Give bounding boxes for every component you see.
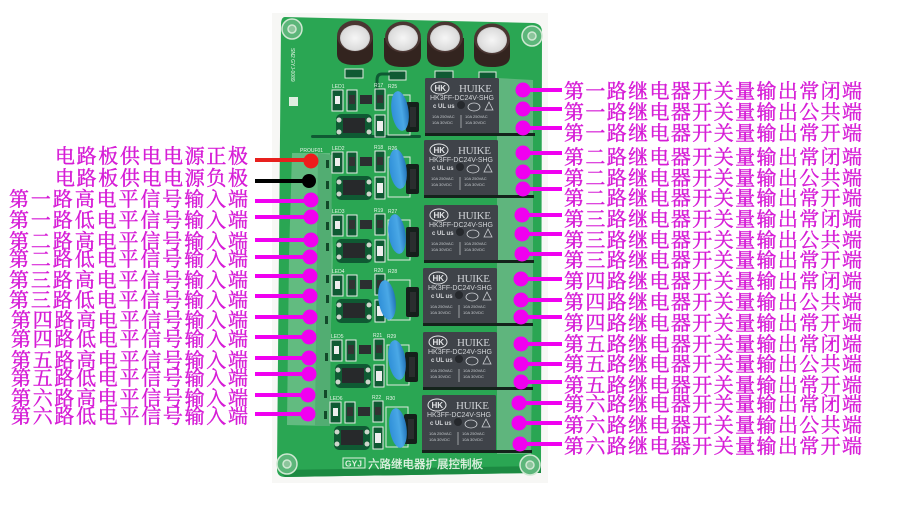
relay 1: c UL us <box>433 104 455 110</box>
label: relay 1 NO: 第一路继电器开关量输出常开端 <box>564 122 862 145</box>
label: relay 1 NC: 第一路继电器开关量输出常闭端 <box>564 80 862 103</box>
capacitors <box>337 20 510 67</box>
circuit row 5: R29 <box>387 334 396 340</box>
label: input 2 high: 第二路高电平信号输入端 <box>9 230 248 253</box>
circuit row 5: R21 <box>373 333 382 339</box>
board model text: SN2 GYJ-0089 <box>289 48 295 82</box>
relay 5: 10A 30VDC <box>463 374 484 379</box>
relay 5: HK <box>432 338 444 347</box>
relay 1: HK <box>434 84 446 93</box>
relay 2: HK3FF-DC24V-SHG <box>429 157 493 164</box>
circuit row 5: LED5 <box>331 334 344 340</box>
circuit row 1: LED1 <box>332 84 345 90</box>
label: relay 5 COM: 第五路继电器开关量输出公共端 <box>564 353 862 376</box>
negative power pointer <box>255 174 316 188</box>
positive power pointer <box>255 154 318 168</box>
label: input 2 low: 第二路低电平信号输入端 <box>9 248 248 271</box>
circuit row 6: R22 <box>372 395 381 401</box>
right terminal block <box>497 78 533 454</box>
label: relay 5 NC: 第五路继电器开关量输出常闭端 <box>564 333 862 356</box>
circuit row 4: R20 <box>374 268 383 274</box>
relay 2: 10A 30VDC <box>431 182 452 187</box>
relay 6: 10A 250VAC <box>429 431 452 436</box>
relay 5: 10A 30VDC <box>430 374 451 379</box>
relay 6: c UL us <box>430 421 452 427</box>
label: relay 3 COM: 第三路继电器开关量输出公共端 <box>564 229 862 252</box>
relay 1: HUIKE <box>459 83 492 95</box>
circuit row 2 <box>332 145 419 200</box>
relay 5: 10A 250VAC <box>430 368 453 373</box>
circuit row 3: R27 <box>388 209 397 215</box>
label: relay 6 NC: 第六路继电器开关量输出常闭端 <box>564 393 862 416</box>
label: input 6 high: 第六路高电平信号输入端 <box>11 387 248 410</box>
circuit row 3: R19 <box>374 208 383 214</box>
terminal label: PROUF01 <box>300 148 323 154</box>
relay 1: 10A 250VAC <box>465 114 488 119</box>
label: relay 6 COM: 第六路继电器开关量输出公共端 <box>564 414 862 437</box>
relay 5: HUIKE <box>457 337 490 349</box>
relay 4: 10A 30VDC <box>430 310 451 315</box>
relay 3: 10A 30VDC <box>464 247 485 252</box>
relay 4: HK <box>432 274 444 283</box>
circuit row 4 <box>332 268 419 323</box>
circuit row 1: R17 <box>374 83 383 89</box>
relay 3: 10A 250VAC <box>464 241 487 246</box>
label: relay 5 NO: 第五路继电器开关量输出常开端 <box>564 374 862 397</box>
relay 1 <box>425 78 535 136</box>
label: input 4 low: 第四路低电平信号输入端 <box>11 328 248 351</box>
relay 1: 10A 30VDC <box>465 120 486 125</box>
relay 4 <box>423 268 533 326</box>
circuit row 6 <box>330 395 417 450</box>
relay 4: 10A 250VAC <box>463 304 486 309</box>
label: input 1 high: 第一路高电平信号输入端 <box>9 188 248 211</box>
label: relay 3 NO: 第三路继电器开关量输出常开端 <box>564 249 862 272</box>
label: relay 2 NO: 第二路继电器开关量输出常开端 <box>564 187 862 210</box>
relay 3: HK <box>434 211 445 220</box>
label: input 4 high: 第四路高电平信号输入端 <box>11 309 248 332</box>
circuit board <box>277 17 542 477</box>
photo background <box>272 13 548 483</box>
relay 3: HUIKE <box>458 210 491 222</box>
relay 6: HK3FF-DC24V-SHG <box>427 412 491 419</box>
left terminal block <box>287 153 333 426</box>
relay 6: HK <box>432 401 443 410</box>
label: input 3 low: 第三路低电平信号输入端 <box>9 289 248 312</box>
label: input 3 high: 第三路高电平信号输入端 <box>9 269 248 292</box>
relay 2 <box>424 140 534 198</box>
mounting holes <box>277 19 542 475</box>
label: relay 2 NC: 第二路继电器开关量输出常闭端 <box>564 146 862 169</box>
relay 2: HK <box>434 146 445 155</box>
circuit row 6: LED6 <box>330 396 343 402</box>
relay 2: 10A 250VAC <box>431 176 454 181</box>
label: relay 4 NC: 第四路继电器开关量输出常闭端 <box>564 270 862 293</box>
label: input 5 low: 第五路低电平信号输入端 <box>11 367 248 390</box>
label: input 5 high: 第五路高电平信号输入端 <box>11 349 248 372</box>
relay 2: HUIKE <box>458 145 491 157</box>
relay 2: 10A 30VDC <box>464 182 485 187</box>
label: input 6 low: 第六路低电平信号输入端 <box>11 405 248 428</box>
board trace <box>377 74 398 94</box>
label: relay 4 COM: 第四路继电器开关量输出公共端 <box>564 291 862 314</box>
board title: 六路继电器扩展控制板 <box>368 457 483 471</box>
relay 5: HK3FF-DC24V-SHG <box>428 349 492 356</box>
relay 4: HUIKE <box>457 273 490 285</box>
relay 4: 10A 250VAC <box>430 304 453 309</box>
circuit row 1: R25 <box>388 84 397 90</box>
circuit row 5 <box>331 333 418 388</box>
circuit row 2: R18 <box>374 145 383 151</box>
circuit row 2: R26 <box>388 146 397 152</box>
label: relay 2 COM: 第二路继电器开关量输出公共端 <box>564 167 862 190</box>
right labels <box>564 80 862 458</box>
circuit row 4: LED4 <box>332 269 345 275</box>
small capacitors <box>345 69 496 80</box>
input pointers <box>255 192 318 422</box>
label: relay 4 NO: 第四路继电器开关量输出常开端 <box>564 312 862 335</box>
left labels <box>9 145 248 428</box>
relay control board photo <box>277 17 542 477</box>
circuit row 3: LED3 <box>332 209 345 215</box>
label: power positive: 电路板供电电源正极 <box>55 145 248 168</box>
label: relay 1 COM: 第一路继电器开关量输出公共端 <box>564 101 862 124</box>
circuit row 4: R28 <box>388 269 397 275</box>
relay 3 <box>424 205 534 263</box>
relay 6: 10A 30VDC <box>429 437 450 442</box>
relay 2: 10A 250VAC <box>464 176 487 181</box>
circuit row 2: LED2 <box>332 146 345 152</box>
relay 5: c UL us <box>431 358 453 364</box>
relay 5: 10A 250VAC <box>463 368 486 373</box>
relay 2: c UL us <box>432 166 454 172</box>
output pointers <box>512 82 562 452</box>
circuit row 1 <box>332 83 419 138</box>
label: relay 6 NO: 第六路继电器开关量输出常开端 <box>564 435 862 458</box>
relay 1: HK3FF-DC24V-SHG <box>430 95 494 102</box>
relay 3: c UL us <box>432 231 454 237</box>
circuit row 3 <box>332 208 419 263</box>
relay 5 <box>423 332 533 390</box>
relay 4: HK3FF-DC24V-SHG <box>428 285 492 292</box>
relay 1: 10A 250VAC <box>432 114 455 119</box>
board title: GYJ <box>345 458 362 468</box>
relay 3: 10A 30VDC <box>431 247 452 252</box>
label: relay 3 NC: 第三路继电器开关量输出常闭端 <box>564 208 862 231</box>
relay 1: 10A 30VDC <box>432 120 453 125</box>
label: power negative: 电路板供电电源负极 <box>55 167 248 190</box>
circuit row 6: R30 <box>386 396 395 402</box>
relay 4: 10A 30VDC <box>463 310 484 315</box>
relay 3: 10A 250VAC <box>431 241 454 246</box>
relay 6: 10A 250VAC <box>462 431 485 436</box>
relay 6: HUIKE <box>456 400 489 412</box>
relay 3: HK3FF-DC24V-SHG <box>429 222 493 229</box>
relay 6: 10A 30VDC <box>462 437 483 442</box>
relay 4: c UL us <box>431 294 453 300</box>
label: input 1 low: 第一路低电平信号输入端 <box>9 209 248 232</box>
relay 6 <box>422 395 532 453</box>
